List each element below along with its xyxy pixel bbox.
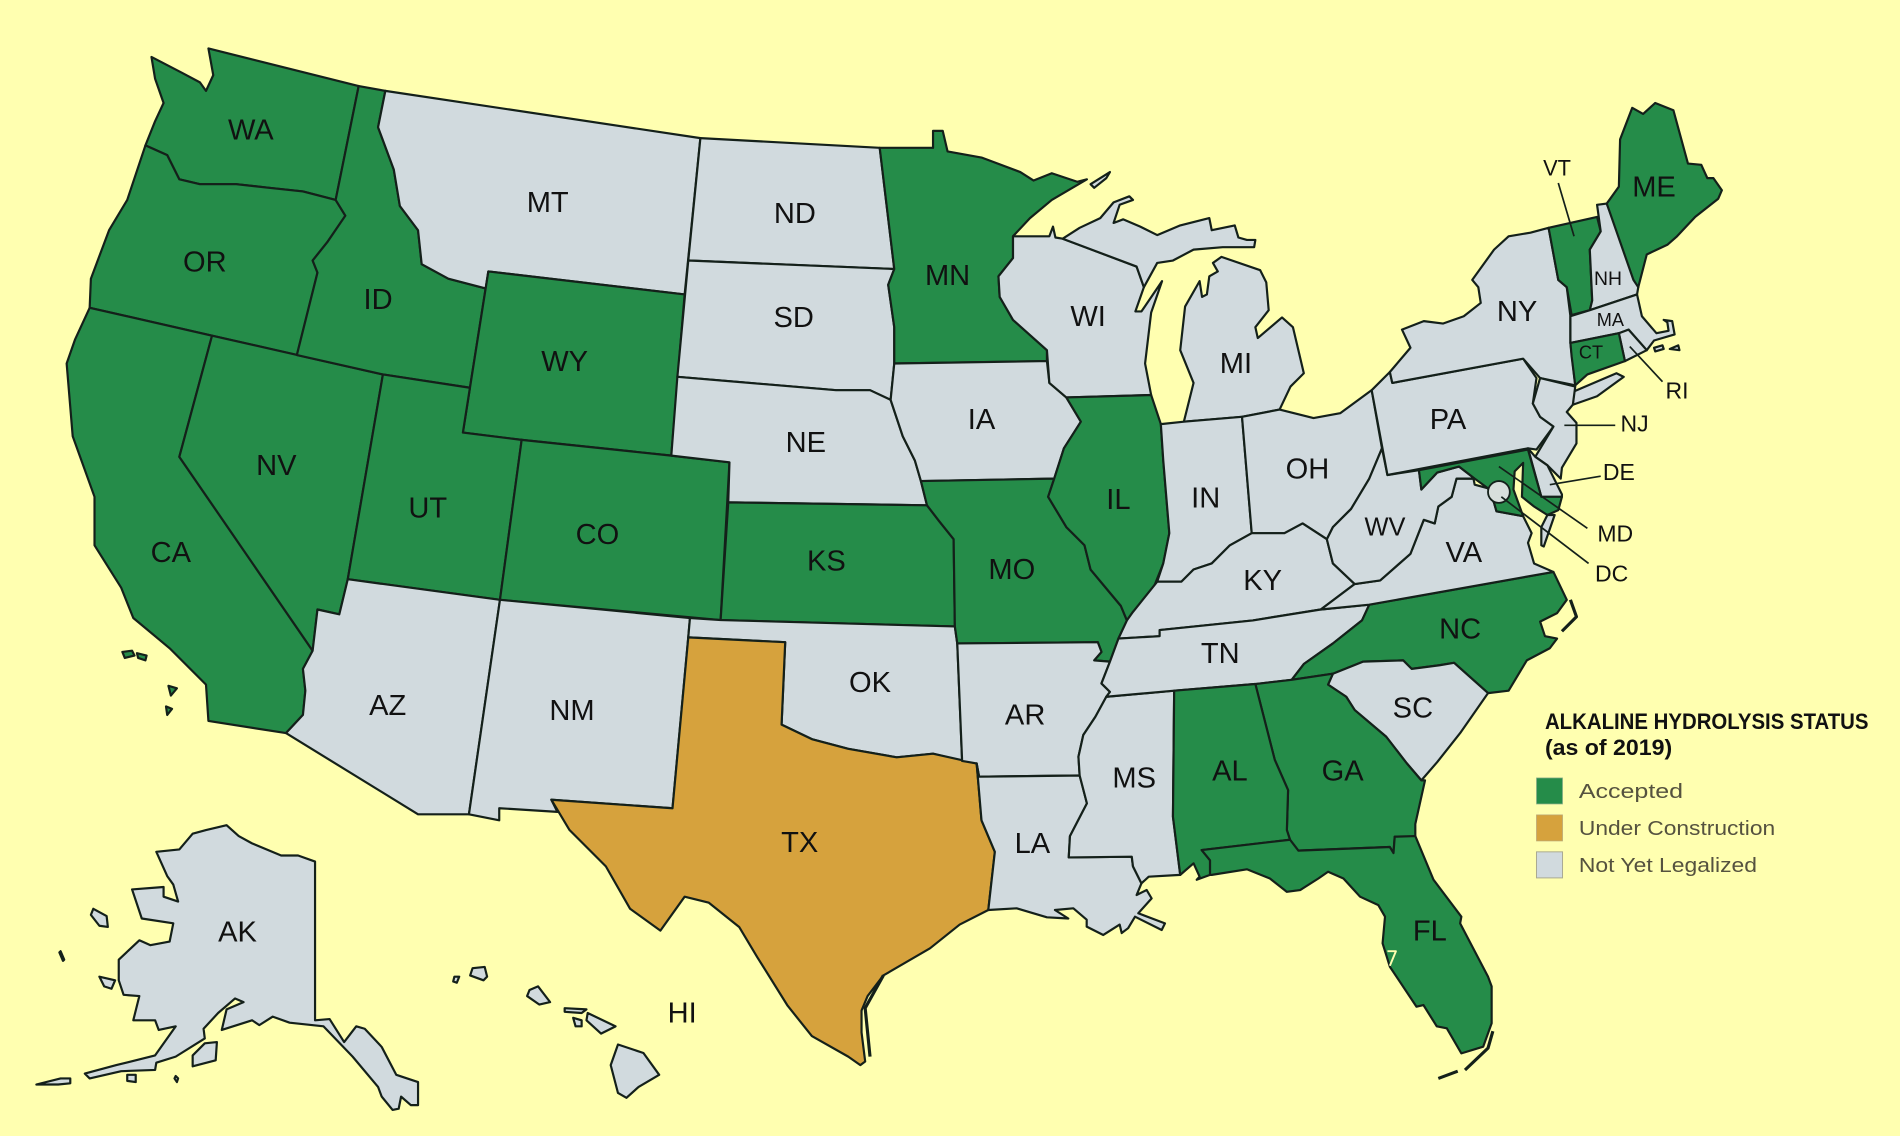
callout: RI: RI bbox=[1666, 378, 1689, 404]
state: North Carolina bbox=[1292, 572, 1567, 693]
state: Alaska: AK bbox=[218, 917, 257, 949]
state: Georgia bbox=[1255, 674, 1425, 853]
state: Idaho: ID bbox=[364, 284, 393, 316]
state: Illinois: IL bbox=[1106, 484, 1131, 516]
state: New Hampshire: NH bbox=[1594, 268, 1622, 290]
state: Colorado: CO bbox=[576, 519, 619, 551]
state: Michigan lower peninsula: MI bbox=[1220, 348, 1252, 380]
state: Virginia bbox=[1321, 479, 1553, 610]
state: Alabama: AL bbox=[1212, 755, 1248, 787]
state: Kansas bbox=[721, 502, 955, 626]
state: Oklahoma bbox=[688, 618, 962, 761]
callout: MD bbox=[1499, 467, 1633, 547]
state: Maine bbox=[1607, 103, 1722, 287]
state: Oklahoma: OK bbox=[849, 667, 892, 699]
legend item: under construction: Under Construction bbox=[1579, 817, 1775, 840]
state: Santa Catalina bbox=[168, 686, 177, 696]
state: Utah bbox=[348, 374, 522, 600]
state: Idaho bbox=[297, 86, 486, 388]
state: West Virginia bbox=[1327, 448, 1475, 584]
state: Iowa bbox=[891, 361, 1081, 481]
label: HI: HI bbox=[668, 998, 697, 1030]
callout: MD: MD bbox=[1597, 521, 1633, 547]
state: South Dakota bbox=[677, 261, 894, 400]
state: Minnesota bbox=[880, 131, 1087, 364]
state: Michigan upper peninsula bbox=[1063, 196, 1255, 287]
state: Oregon bbox=[90, 145, 345, 355]
legend item: under construction bbox=[1536, 815, 1775, 841]
callout: RI bbox=[1630, 347, 1689, 404]
state: Pennsylvania bbox=[1372, 359, 1553, 475]
state: Kentucky: KY bbox=[1243, 565, 1282, 597]
state: South Carolina: SC bbox=[1393, 692, 1433, 724]
state: Montana: MT bbox=[527, 187, 569, 219]
state: South Dakota: SD bbox=[773, 302, 814, 334]
state: Wisconsin bbox=[998, 227, 1162, 397]
state: Arkansas: AR bbox=[1005, 700, 1045, 732]
callout: DE bbox=[1550, 459, 1635, 485]
state: Arizona bbox=[286, 579, 500, 814]
state: Channel islands bbox=[122, 651, 135, 658]
state: Oregon: OR bbox=[183, 246, 227, 278]
state: Michigan lower peninsula bbox=[1180, 257, 1304, 422]
state: Georgia: GA bbox=[1322, 755, 1364, 787]
state: New Mexico bbox=[469, 600, 690, 820]
Long Island bbox=[1573, 373, 1624, 405]
legend bbox=[1536, 709, 1868, 878]
legend item: not yet legalized bbox=[1536, 852, 1757, 878]
state: Colorado bbox=[500, 440, 729, 620]
state: West Virginia: WV bbox=[1365, 514, 1406, 542]
state: Kentucky bbox=[1118, 523, 1355, 639]
state: Virginia: VA bbox=[1445, 537, 1483, 569]
state: North Carolina: NC bbox=[1439, 614, 1481, 646]
state: Ohio: OH bbox=[1286, 454, 1329, 486]
state: Massachusetts bbox=[1570, 294, 1675, 350]
state: Kansas: KS bbox=[807, 546, 846, 578]
state: Montana bbox=[378, 91, 700, 294]
legend item: not yet legalized: Not Yet Legalized bbox=[1579, 854, 1757, 877]
state: Wisconsin: WI bbox=[1070, 301, 1106, 333]
state: Iowa: IA bbox=[968, 404, 996, 436]
Tampa Bay bbox=[1387, 951, 1396, 966]
state: New Hampshire bbox=[1590, 204, 1638, 310]
state: Minnesota: MN bbox=[925, 260, 970, 292]
state: California bbox=[67, 308, 313, 733]
state: Nevada: NV bbox=[256, 450, 297, 482]
callout: VT: VT bbox=[1543, 156, 1571, 181]
state: Arizona: AZ bbox=[369, 690, 406, 722]
state: Utah: UT bbox=[408, 492, 447, 524]
state: Connecticut bbox=[1570, 333, 1625, 385]
state: New Mexico: NM bbox=[549, 695, 595, 727]
state: Indiana: IN bbox=[1191, 483, 1220, 515]
Virginia eastern shore bbox=[1541, 515, 1555, 546]
state: Indiana bbox=[1157, 417, 1252, 582]
state: Hawaii bbox=[453, 967, 659, 1098]
callout: NJ: NJ bbox=[1621, 410, 1649, 436]
state: Texas: TX bbox=[781, 827, 818, 859]
state: Florida: FL bbox=[1413, 915, 1447, 947]
callout: DC: DC bbox=[1595, 561, 1628, 587]
callout: NJ bbox=[1564, 410, 1649, 436]
state: Wyoming: WY bbox=[541, 346, 588, 378]
state: Mississippi: MS bbox=[1112, 763, 1156, 795]
state: North Dakota bbox=[688, 138, 894, 269]
state: Maryland bbox=[1419, 450, 1562, 516]
state: Mississippi bbox=[1069, 691, 1180, 883]
state: Washington bbox=[145, 48, 359, 200]
state: Delaware bbox=[1528, 448, 1562, 497]
state: Channel islands east bbox=[137, 653, 147, 660]
legend title: ALKALINE HYDROLYSIS STATUS bbox=[1545, 709, 1868, 734]
state: New York bbox=[1390, 228, 1575, 385]
legend subtitle: (as of 2019) bbox=[1545, 735, 1672, 760]
state: Nebraska bbox=[671, 377, 927, 505]
state: Washington: WA bbox=[228, 114, 274, 146]
callout: DC bbox=[1501, 497, 1628, 587]
state: Alaska bbox=[85, 825, 418, 1110]
state: Nevada bbox=[179, 336, 383, 651]
small state callouts bbox=[1499, 156, 1689, 587]
state: Massachusetts: MA bbox=[1597, 310, 1625, 330]
state: Missouri: MO bbox=[988, 554, 1035, 586]
state: Louisiana: LA bbox=[1015, 828, 1051, 860]
state: Ohio bbox=[1242, 390, 1382, 539]
state: Texas bbox=[551, 637, 995, 1065]
state: New York: NY bbox=[1497, 296, 1537, 328]
legend item: accepted bbox=[1536, 778, 1683, 804]
state: Wyoming bbox=[463, 271, 685, 456]
Florida lower keys bbox=[1438, 1071, 1458, 1078]
state: Arkansas bbox=[957, 642, 1110, 777]
Texas barrier island bbox=[865, 975, 883, 1057]
state: Alabama bbox=[1173, 684, 1290, 880]
callout: VT bbox=[1543, 156, 1574, 236]
state: San Clemente bbox=[166, 706, 172, 715]
state: New Jersey bbox=[1533, 378, 1576, 479]
state: Connecticut: CT bbox=[1579, 343, 1603, 363]
Outer Banks bbox=[1562, 600, 1576, 631]
state: California: CA bbox=[151, 537, 192, 569]
state: South Carolina bbox=[1328, 660, 1488, 780]
state: Louisiana bbox=[977, 763, 1165, 935]
Isle Royale bbox=[1091, 172, 1110, 188]
marker: DC circle bbox=[1488, 481, 1510, 503]
Nantucket and Martha's Vineyard bbox=[1654, 345, 1679, 351]
state: Maine: ME bbox=[1632, 171, 1676, 203]
callout: DE: DE bbox=[1603, 459, 1635, 485]
state: North Dakota: ND bbox=[774, 198, 816, 230]
state: Illinois bbox=[1048, 395, 1169, 620]
state: Nebraska: NE bbox=[786, 427, 826, 459]
state: Rhode Island bbox=[1619, 330, 1647, 361]
state: Florida bbox=[1202, 836, 1492, 1053]
legend item: accepted: Accepted bbox=[1579, 780, 1683, 803]
state: Tennessee: TN bbox=[1201, 638, 1240, 670]
state: Tennessee bbox=[1101, 605, 1369, 697]
Florida keys bbox=[1465, 1031, 1493, 1070]
state: Vermont bbox=[1549, 217, 1601, 315]
state: Missouri bbox=[921, 479, 1127, 662]
Alaska islands bbox=[36, 909, 217, 1085]
state: Pennsylvania: PA bbox=[1430, 404, 1467, 436]
